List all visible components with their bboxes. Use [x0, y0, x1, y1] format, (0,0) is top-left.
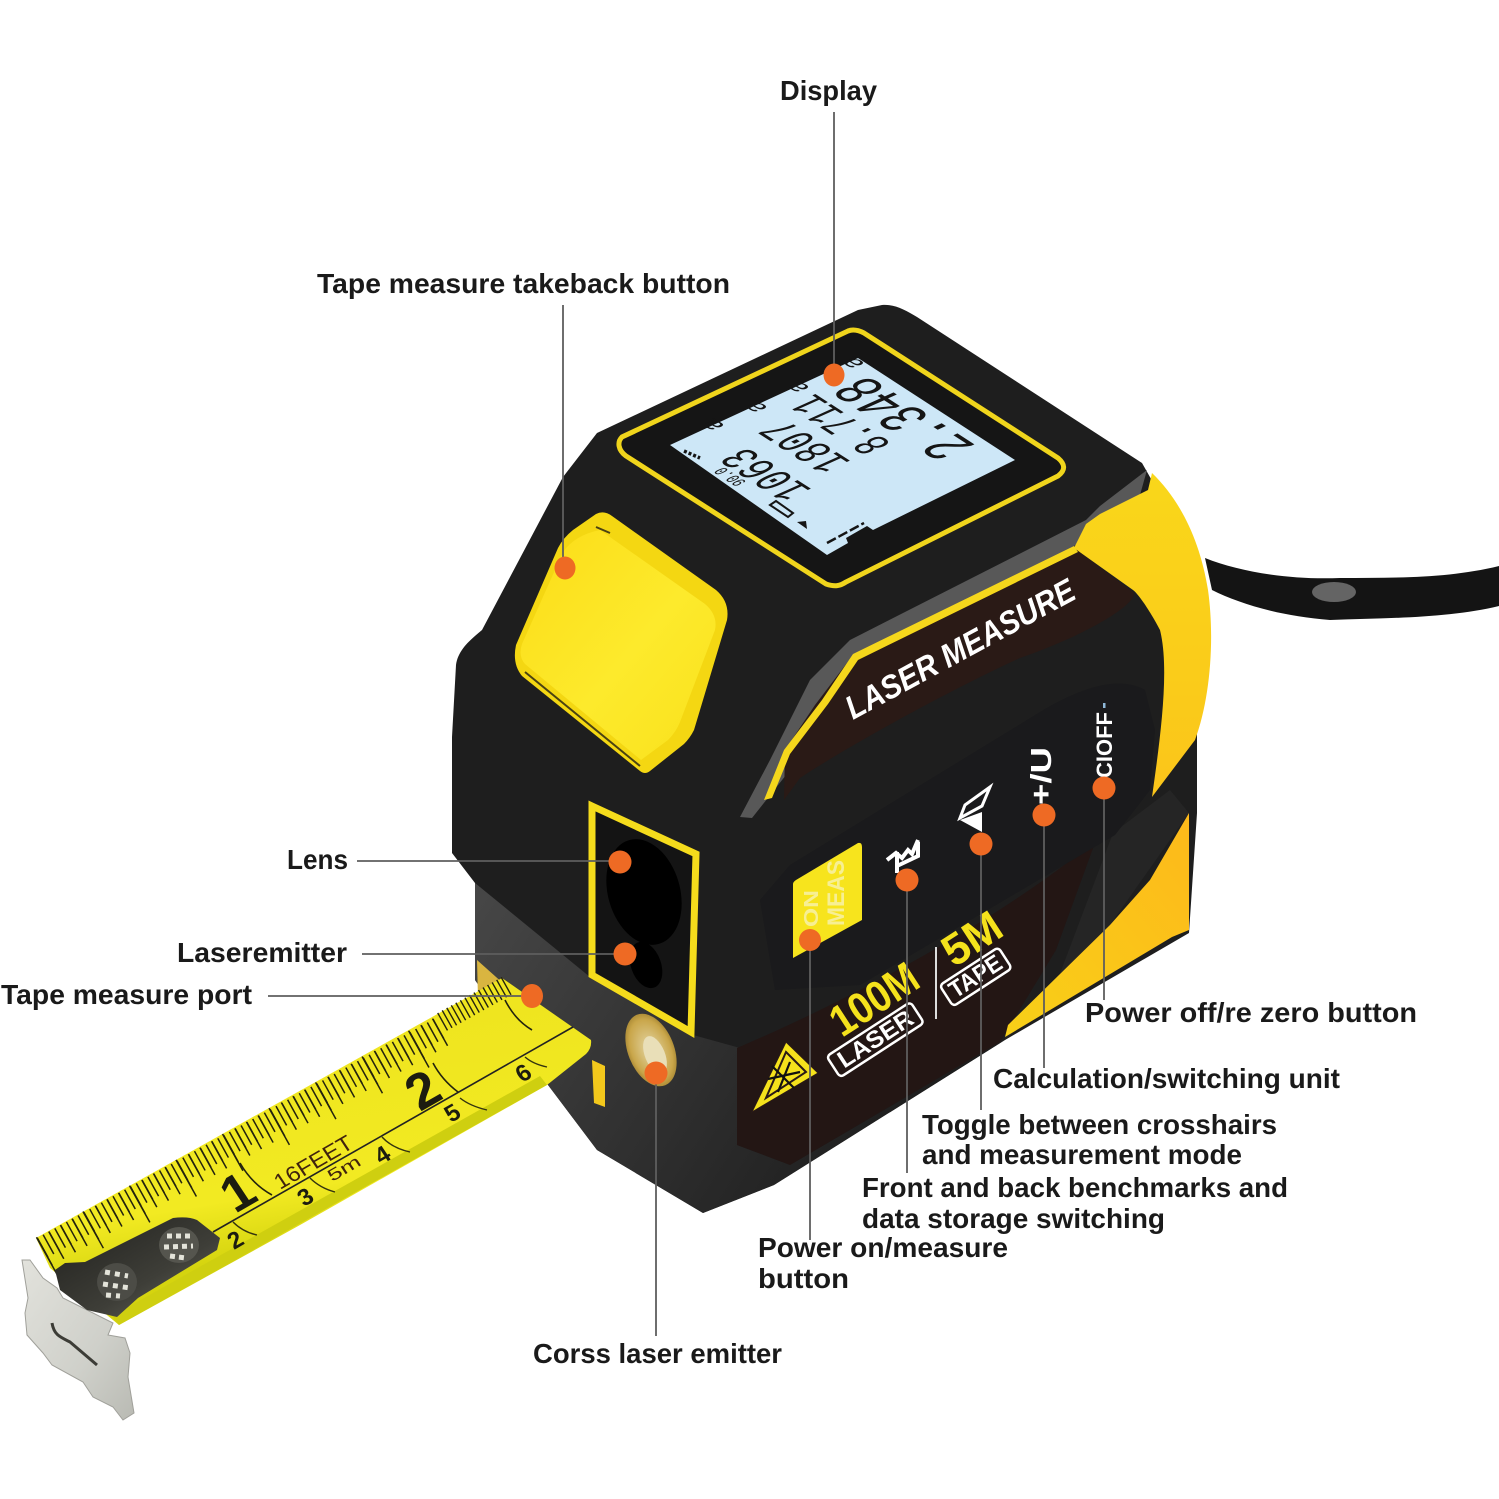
device body — [452, 305, 1211, 1213]
metal clip — [55, 1217, 220, 1317]
housing: yellow side arc — [1074, 473, 1211, 797]
tape ticks near port — [442, 985, 508, 1022]
housing: yellow trim — [764, 546, 1078, 800]
label: front and back — [862, 1172, 1288, 1234]
panel: measuring tape — [22, 978, 591, 1420]
icon: laser warning triangle — [752, 1042, 818, 1112]
icon: crosshair toggle — [960, 787, 990, 832]
tape numbers: 2 — [222, 1226, 249, 1255]
tape port tab — [477, 960, 505, 1000]
tape numbers — [210, 1059, 537, 1255]
label: toggle: Toggle between crosshairs — [922, 1109, 1277, 1140]
display readings: 1807 — [749, 413, 866, 478]
icon: cross laser emitter — [615, 1006, 687, 1094]
housing: grey chamfer — [740, 470, 1147, 818]
panel: laser window — [592, 806, 696, 1032]
housing: lower grey base — [475, 883, 1005, 1213]
display readings: 1063 — [710, 441, 827, 506]
housing: main black shell — [452, 305, 1197, 1213]
label: toggle: and measurement mode — [922, 1139, 1242, 1170]
label: front and back: data storage switching — [862, 1203, 1165, 1234]
display readings — [684, 352, 994, 543]
label: toggle — [922, 1109, 1277, 1170]
window frame — [592, 806, 696, 1032]
laser tag: LASER — [833, 1005, 919, 1074]
button shadow lines — [525, 527, 640, 766]
button frame — [515, 512, 728, 773]
battery — [770, 501, 793, 517]
tape fine ticks — [42, 1027, 442, 1248]
tape long ticks — [240, 1000, 532, 1195]
housing: dark brown band — [737, 840, 1096, 1165]
tape numbers: 4 — [369, 1141, 396, 1170]
panel: display — [619, 330, 1064, 586]
housing: yellow lower-right panel — [1005, 813, 1189, 1037]
label: power on: Power on/measure — [758, 1232, 1008, 1263]
tape half ticks — [46, 1034, 446, 1256]
text: laser measure logo: LASER MEASURE — [839, 571, 1082, 726]
label: cross laser emitter: Corss laser emitter — [533, 1338, 782, 1369]
display bezel — [619, 330, 1064, 586]
100m laser: 100M — [821, 953, 928, 1046]
label: calculation: Calculation/switching unit — [993, 1063, 1340, 1094]
button: on meas: MEAS — [823, 860, 850, 926]
housing: right grey corner — [1005, 790, 1189, 1040]
marker dots — [521, 364, 1116, 1084]
display readings: a — [693, 414, 733, 435]
label: display: Display — [780, 75, 877, 106]
display readings: 8.711 — [779, 387, 906, 460]
housing: laser measure panel — [784, 548, 1134, 800]
rivet right highlight — [164, 1236, 193, 1258]
5m tape: 5M — [933, 902, 1011, 976]
metal hook — [22, 1260, 134, 1420]
label: power on — [758, 1232, 1008, 1294]
label: power off: Power off/re zero button — [1085, 997, 1417, 1028]
divider — [935, 947, 937, 1019]
lens — [595, 830, 693, 954]
label: lens: Lens — [287, 844, 348, 875]
tape numbers: 16FEET — [269, 1130, 358, 1194]
tape dividers — [233, 1057, 547, 1235]
tape numbers: 5 — [439, 1099, 466, 1128]
display readings: a — [736, 396, 776, 417]
button: on meas: ON — [801, 890, 823, 927]
panel: specifications — [821, 902, 1012, 1078]
text: c/off: CIOFF — [1092, 712, 1117, 778]
display readings: a — [833, 352, 873, 373]
display readings: a — [778, 376, 818, 397]
tape numbers: 2 — [395, 1059, 452, 1122]
tape measure cord — [1205, 558, 1499, 620]
laser emitter opening — [624, 937, 668, 993]
tape numbers: 1 — [210, 1161, 267, 1224]
tape tag: TAPE — [944, 950, 1007, 1004]
icon: yellow takeback button — [515, 512, 728, 773]
icon: calculate: +/U — [1026, 747, 1058, 805]
tape medium ticks — [44, 1030, 444, 1252]
button face — [521, 530, 716, 760]
label: laser emitter: Laseremitter — [177, 937, 347, 968]
rivet left highlight — [103, 1272, 130, 1296]
hook slot — [52, 1323, 97, 1365]
icon: benchmark switch — [887, 840, 918, 873]
signal dots — [684, 451, 700, 458]
tape lower edge — [112, 1076, 547, 1325]
leader lines — [268, 112, 1104, 1336]
tape mid line — [213, 1027, 573, 1232]
display readings: 2.348 — [819, 367, 994, 467]
tape numbers: 3 — [292, 1183, 319, 1212]
label: tape measure takeback button: Tape measure takeback button — [317, 268, 730, 299]
rivet left — [97, 1263, 137, 1301]
status dashes — [827, 523, 864, 543]
speaker — [797, 521, 807, 529]
tape numbers: 5m — [324, 1152, 365, 1185]
label: power on: button — [758, 1263, 849, 1294]
rivet right — [159, 1227, 199, 1263]
label: front and back: Front and back benchmarks and — [862, 1172, 1288, 1203]
display screen — [670, 358, 1015, 555]
button: on meas — [793, 843, 862, 958]
tape blade — [36, 978, 591, 1325]
label: tape measure port: Tape measure port — [1, 979, 252, 1010]
housing: button panel — [760, 684, 1155, 990]
display readings: 90.0 — [711, 464, 752, 488]
tape numbers: 6 — [510, 1059, 537, 1088]
small yellow strip — [592, 1060, 605, 1107]
